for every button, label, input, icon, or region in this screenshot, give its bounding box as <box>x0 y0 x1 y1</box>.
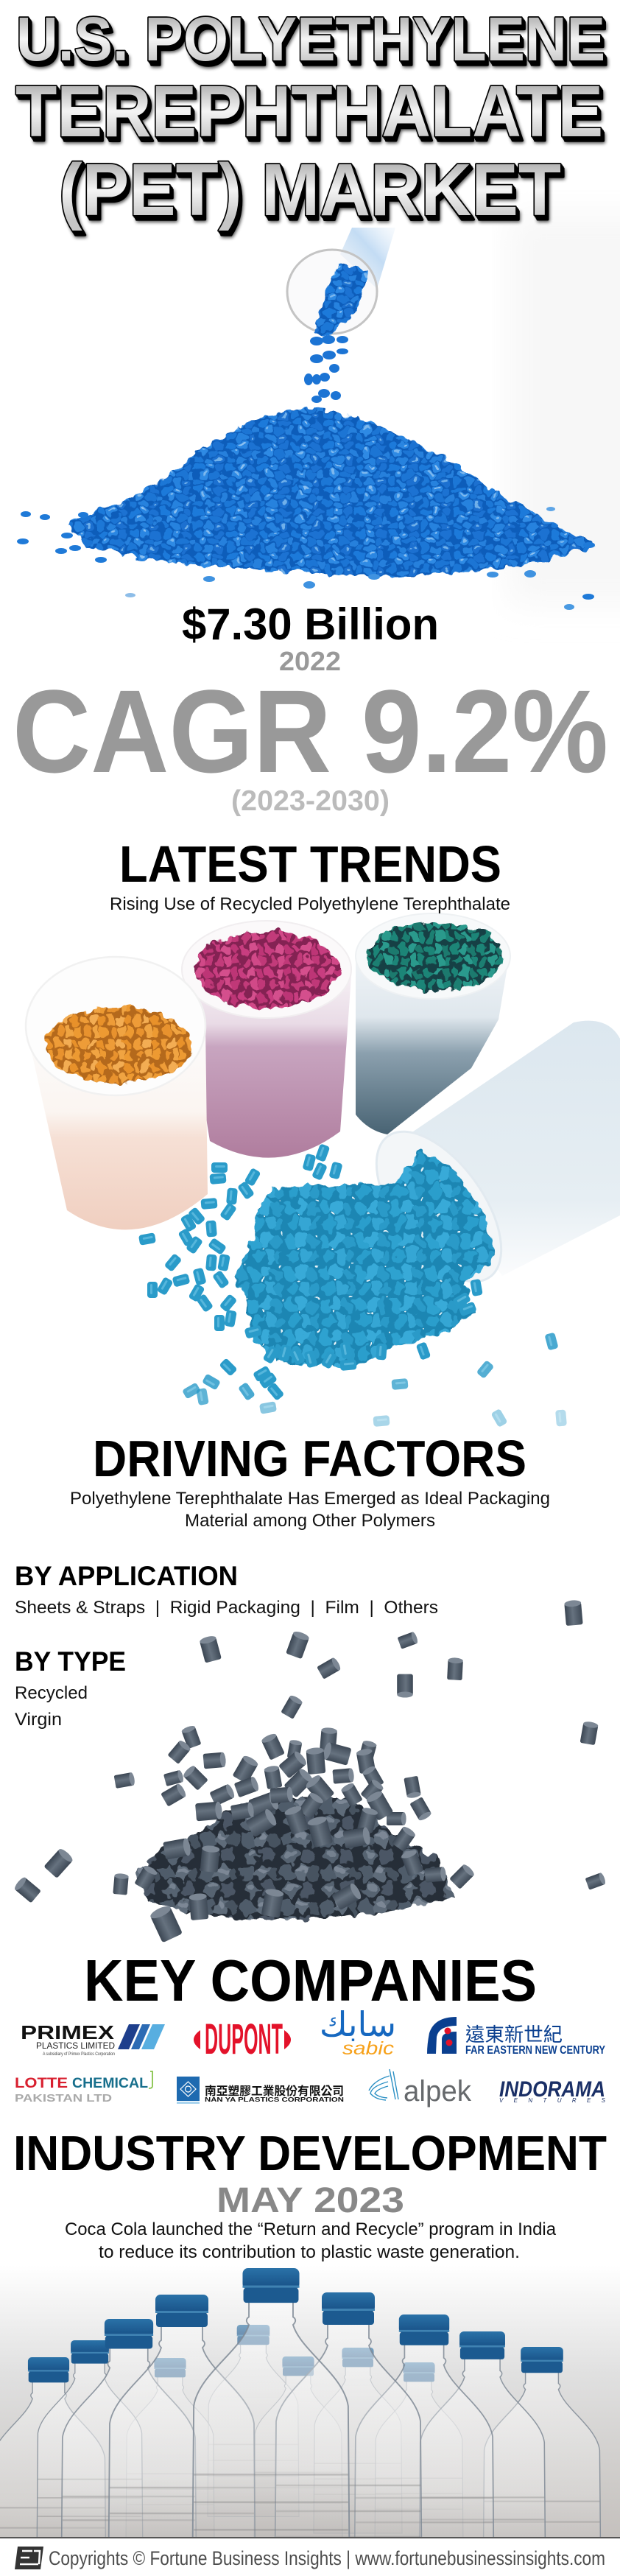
type list: Recycled <box>15 1683 88 1703</box>
logo: nan ya plastics: NAN YA PLASTICS CORPORATION <box>205 2096 344 2103</box>
illustration: grey pellets <box>13 1600 607 1942</box>
icon: fortune business insights logo <box>15 2547 43 2569</box>
logo: indorama ventures: V E N T U R E S <box>499 2097 606 2104</box>
illustration: cups of coloured pellets <box>26 913 620 1428</box>
logo: primex <box>21 2021 165 2057</box>
development text: to reduce its contribution to plastic waste generation. <box>99 2242 520 2262</box>
logo: lotte chemical: LOTTE <box>15 2076 68 2091</box>
heading: driving factors: DRIVING FACTORS <box>93 1430 526 1487</box>
logo: nan ya plastics <box>177 2077 344 2104</box>
title: (PET) MARKET <box>59 149 561 231</box>
cup: orange <box>26 957 208 1229</box>
heading: by type: BY TYPE <box>15 1646 126 1677</box>
heading: key companies: KEY COMPANIES <box>84 1948 537 2013</box>
market size value: $7.30 Billion <box>182 600 439 649</box>
development text: Coca Cola launched the “Return and Recycle” program in India <box>65 2219 557 2239</box>
title <box>15 4 605 231</box>
icon: pellet tube <box>287 228 395 334</box>
heading: latest trends: LATEST TRENDS <box>119 835 501 893</box>
cup: pink <box>182 921 352 1158</box>
cup: tipped blue <box>352 1021 620 1303</box>
scattered blue pellets <box>138 1143 567 1428</box>
logo: sabic: sabic <box>342 2038 395 2059</box>
logo: nan ya plastics: 南亞塑膠工業股份有限公司 <box>205 2084 344 2098</box>
CAGR period: (2023-2030) <box>231 785 390 817</box>
logo: alpek: alpek <box>404 2075 472 2108</box>
logo: alpek <box>369 2069 472 2108</box>
logo: indorama ventures: INDORAMA <box>499 2077 605 2102</box>
type list: Virgin <box>15 1710 62 1730</box>
driving factors text <box>70 1489 550 1531</box>
pellet pile <box>67 407 597 577</box>
development date: MAY 2023 <box>216 2181 404 2220</box>
logo: sabic: سابك <box>320 2004 396 2044</box>
logo: primex: PLASTICS LIMITED <box>36 2040 115 2051</box>
illustration: plastic bottles <box>0 2268 620 2537</box>
logo: far eastern new century <box>427 2017 605 2057</box>
logo: primex: A subsidiary of Primex Plastics Corporation <box>43 2052 115 2057</box>
logo: far eastern new century: 遠東新世紀 <box>465 2024 563 2046</box>
pellet stream <box>304 264 368 403</box>
heading: by application: BY APPLICATION <box>15 1561 238 1591</box>
logo: lotte chemical <box>15 2071 152 2105</box>
market size year: 2022 <box>279 646 341 676</box>
logo: lotte chemical: PAKISTAN LTD <box>15 2092 112 2105</box>
latest trends text: Rising Use of Recycled Polyethylene Terephthalate <box>110 894 510 914</box>
logo: primex: PRIMEX <box>21 2021 115 2043</box>
development text <box>65 2219 557 2262</box>
driving factors text: Material among Other Polymers <box>185 1511 435 1531</box>
hero background haze <box>508 214 620 604</box>
spilled blue pellets <box>236 1151 496 1368</box>
logo: lotte chemical: CHEMICAL <box>72 2076 148 2091</box>
type list <box>15 1683 88 1730</box>
cup: teal <box>356 913 510 1134</box>
driving factors text: Polyethylene Terephthalate Has Emerged as Ideal Packaging <box>70 1489 550 1509</box>
text: DUPONT <box>205 2015 283 2063</box>
application list: Sheets & Straps | Rigid Packaging | Film | Others <box>15 1598 438 1618</box>
scattered blue pellets <box>17 507 595 610</box>
footer rule <box>0 2537 620 2538</box>
logo: dupont <box>194 2015 291 2063</box>
